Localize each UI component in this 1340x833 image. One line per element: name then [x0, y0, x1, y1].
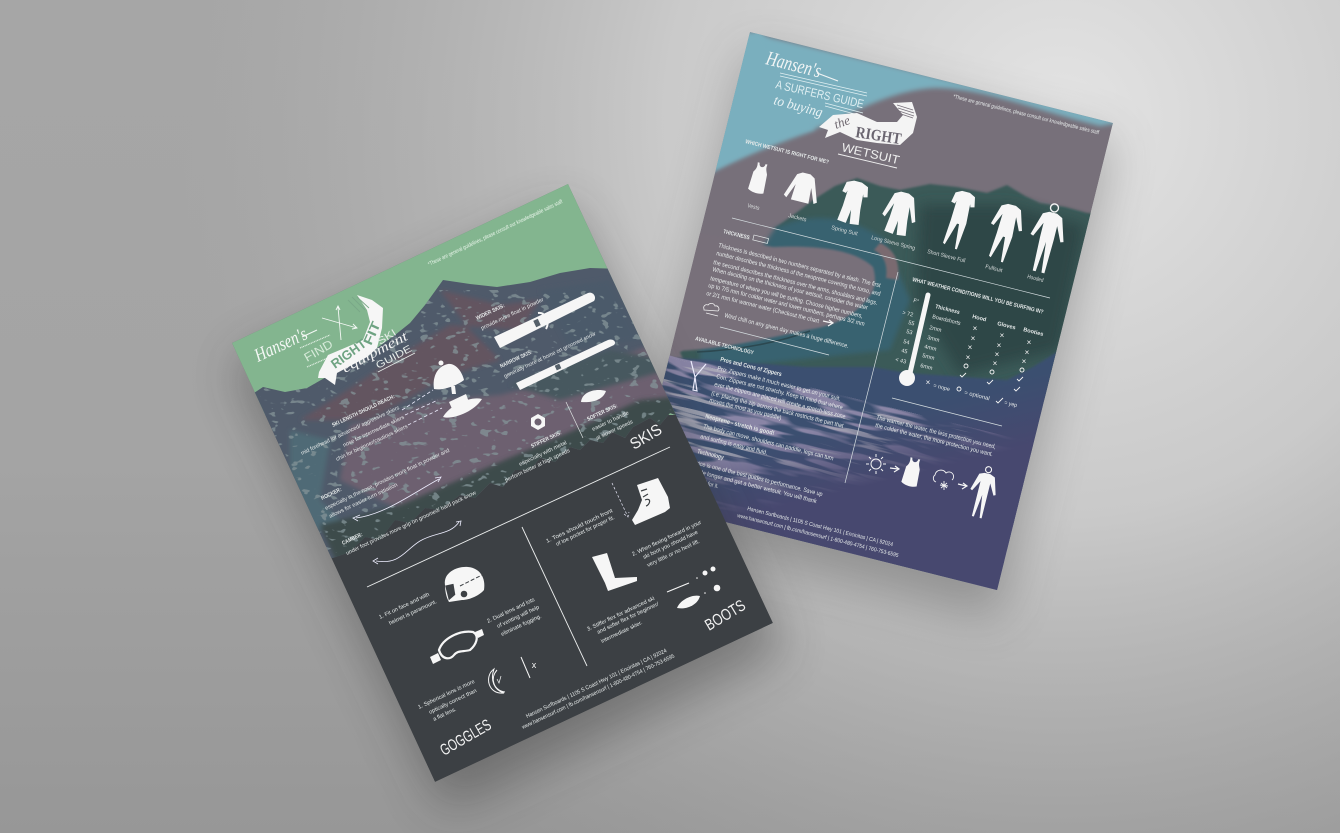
text block: stiffer skis: especially with metal [518, 440, 568, 468]
chart: weather conditions table: 2mm [929, 325, 942, 334]
text block: thickness: temperature of where you will be surfing. Choose higher numbers, [710, 275, 864, 320]
section: boots: and softer flex for beginner/ [596, 601, 660, 636]
section: boots: intermediate skier. [600, 620, 644, 645]
text block: available technology: (i.e. placing the zip across the back restricts the part that [711, 390, 844, 430]
text block: thickness: number describes the thickness of the neoprene covering the torso, and [716, 250, 882, 298]
chart: weather conditions table: Hood [972, 314, 987, 324]
banner: the right wetsuit: RIGHT [854, 124, 903, 148]
label: skis: SKIS [627, 421, 665, 453]
heading: a surfers guide to buying [772, 73, 867, 121]
chart: weather conditions table: Booties [1023, 327, 1044, 338]
text block: wider skis: provide more float in powder [480, 297, 545, 332]
legend: = yep [1004, 400, 1018, 409]
text block: available technology: ever the zippers are placed will create a stretch-less zone [714, 381, 847, 421]
text block: camber: CAMBER: [341, 532, 364, 547]
text block: wider skis: WIDER SKIS: [475, 303, 506, 322]
note: wind chill [704, 303, 850, 350]
banner: the right wetsuit: WETSUIT [840, 140, 902, 167]
icon: spherical lens check [489, 669, 505, 693]
icon: snow cloud [933, 470, 954, 490]
icon: leaf soft [581, 390, 606, 402]
text block: ski length [300, 390, 442, 463]
section: boots: 2. When flexing forward in your [631, 520, 703, 558]
icon: short sleeve full [927, 189, 978, 264]
footer: contact details: www.hansensurf.com | fb.com/hansensurf | 1-800-480-4754 | 760-753-6595 [520, 654, 676, 731]
icon: helmet [445, 567, 484, 602]
icon: vest: Vests [747, 203, 760, 212]
heading: find the right fit ski equipment guide: SKI [376, 328, 399, 348]
section: goggles [378, 567, 543, 759]
text block: available technology: Neoprene - stretch is good! [705, 413, 775, 437]
text block: available technology: Pros and Cons of Zippers [720, 356, 783, 378]
chart: weather conditions table: 55 [908, 320, 915, 327]
section: goggles: eliminate fogging. [500, 613, 543, 638]
heading: a surfers guide to buying: A SURFERS GUIDE [774, 77, 865, 111]
disclaimer: *These are general guidelines, please consult our knowledgeable sales staff [427, 199, 564, 268]
icon: sun [866, 454, 886, 474]
icon: arrow to chart [823, 320, 833, 326]
section: goggles: of venting will help [496, 605, 540, 630]
symbols: hood column: × [971, 334, 976, 343]
icon: crossed arrows [322, 306, 357, 340]
text block: thickness: THICKNESS [723, 229, 750, 242]
wave body [680, 178, 1120, 400]
text block: available technology: a little longer and get a better wetsuit. You will thank [691, 467, 818, 505]
symbols: gloves column: × [993, 359, 998, 368]
icon: thermometer [899, 295, 928, 386]
barrel interior [660, 232, 875, 352]
icon: jacket: Jackets [788, 213, 807, 223]
banner: the right wetsuit [819, 102, 917, 168]
icon: vest [747, 162, 770, 212]
arrow: camber [373, 521, 461, 564]
icon: flex stiff and soft [667, 566, 720, 608]
text block: available technology: and surfing is easy and fluid. [700, 433, 768, 457]
heading: find the right fit ski equipment guide: GUIDE [374, 343, 414, 372]
icon: fullsuit: Fullsuit [985, 264, 1003, 274]
text block: water temperature note: the colder the water, the more protection you want. [875, 422, 994, 458]
heading: find the right fit ski equipment guide: FIND [302, 337, 336, 365]
chart: weather conditions table: > 72 [902, 310, 914, 319]
symbols: gloves column: × [1000, 331, 1005, 340]
symbols: booties column: × [1025, 348, 1030, 357]
icon: jacket [783, 169, 823, 223]
chart: weather conditions table: Boardshorts [932, 314, 961, 327]
text block: ski length: nose for intermediate skiers [342, 415, 406, 449]
icon: vest small [901, 456, 923, 488]
symbols: booties column: × [1022, 357, 1027, 366]
symbols: gloves column: × [995, 350, 1000, 359]
text block: rocker: especially in the nose, provides more float in powder and [324, 448, 451, 512]
text block: stiffer skis: perform better at high speeds [504, 448, 571, 484]
banner: right fit [318, 295, 384, 385]
section: goggles: helmet is paramount. [388, 599, 438, 627]
shadow: ski flyer [232, 206, 785, 810]
text block: narrow skis: generally more at home on groomed snow [503, 331, 598, 380]
text block: thickness: up to 7/5 mm for colder water and lower numbers, perhaps 3/2 mm [708, 282, 865, 328]
heading: a surfers guide to buying: to buying [772, 93, 824, 121]
heading: find the right fit ski equipment guide: equipment [340, 329, 412, 377]
chart: weather conditions table: Gloves [997, 321, 1016, 331]
flyer artwork: wave and water [662, 32, 1113, 590]
icon: spring suit: Spring Suit [831, 225, 859, 238]
text block: water temperature note: The warmer the water, the less protection you need, [876, 414, 997, 451]
chart: weather conditions table: WHAT WEATHER CONDITIONS WILL YOU BE SURFING IN? [912, 277, 1044, 316]
icon: boot liner [592, 553, 637, 591]
chart: weather conditions table: 4mm [924, 344, 937, 353]
text block: ski length: mid forehead for advanced/ aggressive skiers [300, 405, 401, 457]
text block: softer skis: easier to handle [591, 410, 630, 433]
symbols: hood column: × [966, 353, 971, 362]
icon: flat lens cross: x [532, 660, 537, 670]
symbols: gloves column [987, 331, 1005, 384]
legend: = optional [964, 390, 990, 402]
icon: long sleeve spring [871, 189, 922, 252]
section: boots: of toe pocket for proper fit. [555, 515, 616, 548]
icon: goggles [430, 629, 484, 664]
icon row: warm to vest, cold to full suit [866, 454, 1002, 520]
footer: contact details: www.hansensurf.com | fb.com/hansensurf | 1-800-480-4754 | 760-753-6595 [736, 513, 899, 559]
section: boots: ski boot you should have [642, 530, 699, 561]
footer: contact details: Hansen Surfboards | 1105 S Coast Hwy 101 | Encinitas | CA | 92024 [525, 648, 668, 720]
arrow: cold [958, 483, 967, 489]
text block: thickness: the second describes the thickness over the arms, shoulders and legs. [713, 259, 878, 307]
text block: stiffer skis [504, 430, 571, 484]
panel: ski flyer [225, 175, 773, 782]
icon: nut stiff [531, 414, 545, 430]
footer: contact details: Hansen Surfboards | 1105 S Coast Hwy 101 | Encinitas | CA | 92024 [747, 506, 894, 548]
chart: weather conditions table: F° [913, 298, 919, 305]
chart: weather conditions table: 5mm [922, 353, 935, 362]
banner: the right wetsuit: the [832, 112, 852, 132]
section: boots: very little or no heel lift. [646, 539, 701, 569]
label: boots: BOOTS [702, 597, 749, 634]
text block: available technology: yourself for it. [689, 476, 720, 490]
section: goggles: 1. Fit on face and with [378, 592, 431, 621]
banner: right fit: RIGHT [328, 336, 369, 371]
banner: right fit: FIT [360, 319, 384, 347]
flyer artwork: mountains and forest [225, 175, 773, 782]
chart: weather conditions table: < 43 [895, 357, 907, 366]
symbols: hood column: × [973, 324, 978, 333]
icon: spring suit [831, 178, 871, 238]
text block: ski length: chin for beginner/cautious skiers [335, 424, 409, 463]
text block: softer skis [586, 403, 634, 442]
text block: stiffer skis: STIFFER SKIS: [530, 430, 563, 450]
text block: available technology: AVAILABLE TECHNOLOGY [695, 336, 754, 357]
symbols: hood column [960, 324, 978, 377]
text block: thickness: When deciding on the thickness of your wetsuit, consider the water [712, 266, 868, 312]
icon: ski boot [632, 478, 670, 525]
symbols: booties column [1014, 338, 1032, 391]
heading: which wetsuit: WHICH WETSUIT IS RIGHT FOR ME? [745, 139, 830, 166]
chart: weather conditions table: 6mm [920, 363, 933, 372]
logo: Hansen's: Hansen's [763, 47, 824, 82]
icon: hooded suit small [964, 464, 1002, 520]
shadow: wetsuit flyer [634, 52, 1113, 618]
text block: softer skis: at slower speeds [595, 419, 634, 442]
icon: flat lens cross [521, 657, 537, 678]
section: boots [545, 478, 749, 645]
text block: softer skis: SOFTER SKIS: [586, 403, 619, 423]
heading: find the right fit ski equipment guide [300, 295, 415, 385]
water [662, 352, 1056, 590]
text block: thickness: or 2/1 mm for warmer water (Checkout the chart [706, 290, 820, 325]
section: boots: 3. Stiffer flex for advanced ski [586, 596, 656, 633]
section: goggles: a flat lens. [432, 707, 458, 723]
text block: ski length: SKI LENGTH SHOULD REACH: [331, 394, 396, 429]
symbols: hood column: × [968, 343, 973, 352]
legend: × [926, 378, 931, 387]
icon: zipper [691, 361, 706, 391]
icon: long sleeve spring: Long Sleeve Spring [871, 235, 916, 252]
legend: = nope [933, 383, 950, 393]
section: goggles: optically correct than [428, 688, 478, 716]
panel: wetsuit flyer [662, 32, 1113, 590]
icon: short sleeve full: Short Sleeve Full [927, 249, 966, 264]
arrow: rocker [353, 477, 441, 521]
logo: Hansen's: Hansen's [250, 324, 311, 367]
symbols: booties column: × [1027, 338, 1032, 347]
arrow: warm [890, 466, 899, 472]
text block: available technology: Technology [697, 448, 725, 462]
legend [926, 378, 1018, 409]
icon: fullsuit [982, 201, 1028, 274]
label: goggles: GOGGLES [438, 717, 494, 759]
text block: available technology: moves the most as you paddle) [709, 397, 782, 422]
icon: hooded: Hooded [1027, 274, 1044, 284]
icon: hooded [1022, 200, 1072, 284]
icon: head with helmet dome and hat [434, 360, 482, 418]
chart: weather conditions table: 53 [906, 329, 913, 336]
section: goggles: 2. Dual lens and lots [486, 597, 536, 625]
chart: weather conditions table: 54 [903, 339, 910, 346]
text block: thickness: Thickness is described in two numbers separated by a slash. The first [718, 242, 881, 289]
chart: weather conditions table: Thickness [935, 304, 960, 316]
text block: available technology: The body can move, shoulders can paddle, legs can turn [703, 423, 835, 462]
text block: camber: under foot provides more grip on groomed/ hard pack snow [345, 490, 478, 557]
wetsuit row [747, 162, 1072, 284]
disclaimer: *These are general guidelines, please consult our knowledgeable sales staff [953, 94, 1100, 136]
text block: available technology: Con: Zippers are not stretchy. Keep in mind that where [716, 373, 844, 412]
icon: narrow ski [516, 339, 615, 390]
text block: available technology [689, 336, 847, 505]
chart: weather conditions table [895, 277, 1044, 409]
text block: thickness [706, 229, 882, 328]
symbols: gloves column: × [997, 341, 1002, 350]
icon: wide ski [494, 293, 595, 348]
text block: rocker: allows for easier turn initiation [328, 482, 399, 520]
chart: weather conditions table: 3mm [927, 335, 940, 344]
text block: rocker: ROCKER: [320, 487, 343, 502]
text block: available technology: Price is one of the best guides to performance. Save up [693, 459, 824, 498]
chart: weather conditions table: 45 [901, 348, 908, 355]
note: wind chill: Wind chill on any given day makes a huge difference. [724, 312, 850, 350]
text block: available technology: Pro: Zippers make it much easier to get on your suit. [717, 365, 842, 403]
section: boots: 1. Toes should touch front [545, 508, 614, 545]
text block: narrow skis: NARROW SKIS: [499, 349, 534, 370]
section: goggles: 1. Spherical lens is more [417, 679, 476, 711]
